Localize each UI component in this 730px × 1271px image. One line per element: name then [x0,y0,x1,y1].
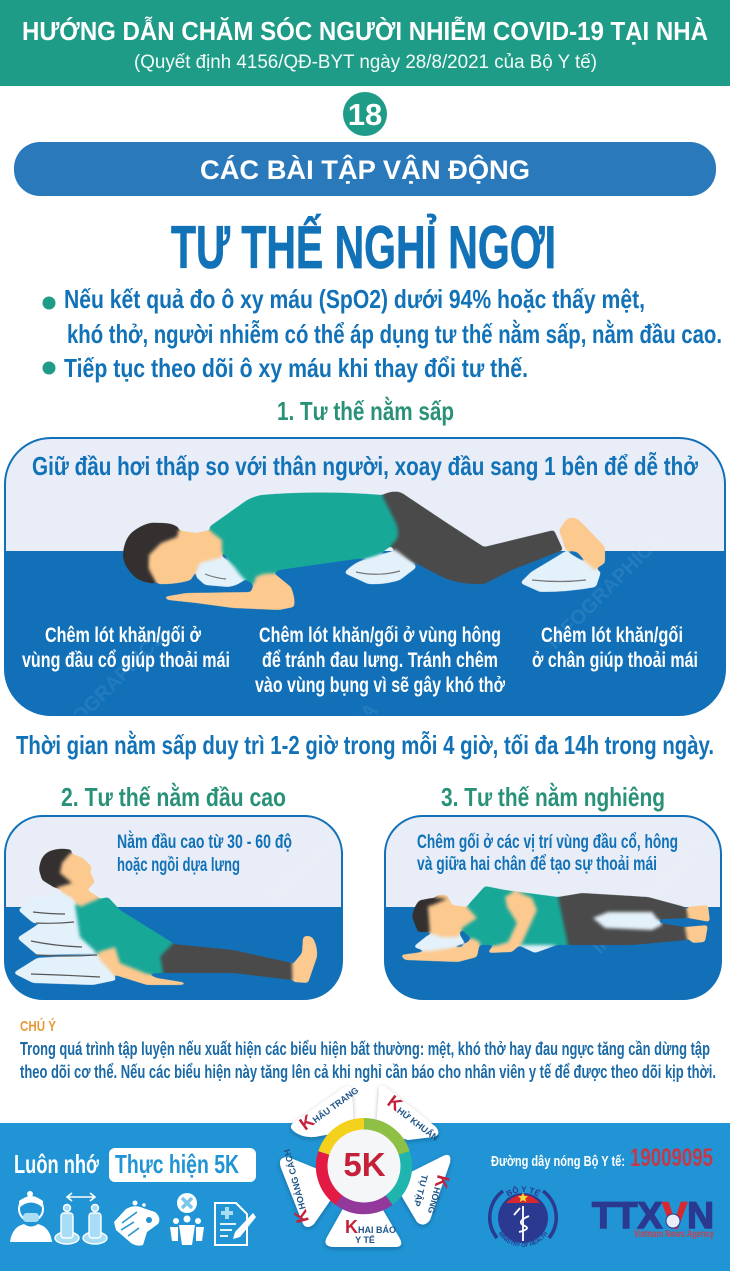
heading: position 2: 2. Tư thế nằm đầu cao [61,782,286,812]
5K wheel: 5K [343,1146,386,1183]
logo: TTXVN: TTXVN [592,1195,714,1236]
logo: Ministry of Health: MINISTRY OF HEALTH [498,1232,548,1247]
petal: health declaration [325,1205,401,1247]
5K reminder label: Luôn nhớ [14,1149,99,1179]
5K reminder label: Thực hiện 5K [115,1149,239,1179]
caption: hip pillow: vào vùng bụng vì sẽ gây khó thở [255,674,505,697]
number badge [343,92,387,136]
intro bullet list: Tiếp tục theo dõi ô xy máu khi thay đổi tư thế. [64,353,528,383]
figure: prone person [123,492,605,610]
caption: hip pillow: để tránh đau lưng. Tránh chêm [262,649,498,672]
panel: head raised position [4,815,343,1000]
warning note: CHÚ Ý [20,1017,56,1035]
header subtitle: (Quyết định 4156/QĐ-BYT ngày 28/8/2021 của Bộ Y tế) [134,52,597,73]
hotline: Đường dây nóng Bộ Y tế: [491,1153,625,1170]
ring segments [322,1124,406,1208]
figure: reclining person [13,849,317,985]
pillow creases [31,912,100,977]
panel: side-lying position [385,816,721,999]
petal: health declaration: KHAI BÁO [345,1217,396,1237]
icon: no gathering [170,1193,204,1245]
panel: prone position: TTXVN - VNA [278,699,382,804]
petal: distance: KHOẢNG CÁCH [274,1148,313,1225]
caption: hip pillow: Chêm lót khăn/gối ở vùng hông [259,624,501,647]
caption: leg pillow [532,624,698,672]
heading: position 1: 1. Tư thế nằm sấp [277,396,454,426]
section banner [14,142,716,196]
panel text: hoặc ngồi dựa lưng [117,855,240,876]
number badge: 18 [348,97,382,132]
panel text [417,832,678,875]
icon: medical declaration [215,1203,256,1245]
warning note [20,1017,716,1082]
panel text: Nằm đầu cao từ 30 - 60 độ [117,831,292,853]
pillow creases [205,571,586,582]
panel: prone position: INFOGRAPHICS [543,530,667,654]
caption: head pillow: Chêm lót khăn/gối ở [45,624,201,647]
petal: no gathering: KHÔNG [424,1173,453,1217]
caption: leg pillow: Chêm lót khăn/gối [541,624,683,647]
panel: prone position: INFOGRAPHICS [46,627,170,751]
panel: prone position [4,437,726,716]
main title: TƯ THẾ NGHỈ NGƠI [171,214,556,281]
caption: head pillow [22,624,230,672]
petal: health declaration: Y TẾ [355,1235,375,1245]
intro bullet list [42,284,722,383]
5K wheel [274,1079,453,1247]
hotline [491,1144,713,1172]
petal: no gathering: TỤ TẬP [412,1173,431,1208]
icon: keep distance [55,1193,107,1244]
petal: disinfect: KHỬ KHUẨN [384,1091,445,1144]
figure: side-lying person [400,886,710,962]
heading: position 3: 3. Tư thế nằm nghiêng [441,782,665,812]
5K reminder label [14,1148,256,1182]
petal: distance [274,1148,332,1227]
icon: face mask [10,1191,52,1242]
panel text [117,831,292,876]
caption: head pillow: vùng đầu cổ giúp thoải mái [22,649,230,672]
petal: mask: KHẨU TRANG [296,1079,362,1134]
panel: head raised position: INFOGRAPHICS [263,785,387,909]
caption: hip pillow [255,624,505,697]
icon: hand washing [114,1200,159,1246]
logo: Ministry of Health: BỘ Y TẾ [506,1186,541,1196]
section banner: CÁC BÀI TẬP VẬN ĐỘNG [200,154,530,185]
panel: side-lying position: INFOGRAPHICS [588,835,712,959]
petal: no gathering [398,1155,453,1225]
logo: Ministry of Health [488,1186,558,1247]
footer band [0,1123,730,1271]
header banner [0,0,730,86]
